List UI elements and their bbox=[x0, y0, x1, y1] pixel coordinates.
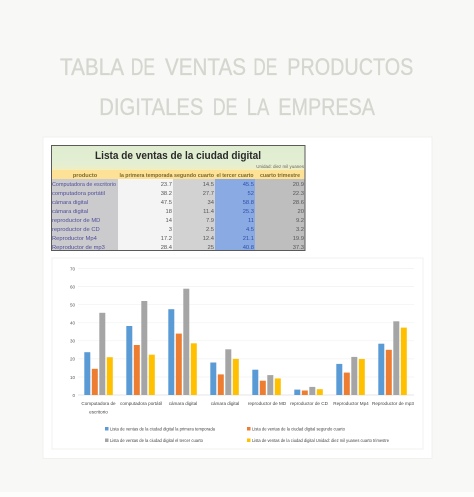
chart legend: Lista de ventas de la ciudad digital Unidad: diez mil yuanes cuarto trimestre bbox=[252, 438, 389, 443]
table header row bbox=[51, 170, 305, 179]
chart y axis labels: 20 bbox=[70, 356, 75, 362]
title bbox=[60, 54, 413, 121]
table values: 28.6 bbox=[293, 200, 304, 206]
chart category labels: Computadora de bbox=[81, 401, 116, 406]
table values: 25 bbox=[208, 245, 214, 251]
chart y axis labels: 30 bbox=[70, 338, 75, 344]
table header row: el tercer cuarto bbox=[216, 173, 254, 179]
table values: 21.1 bbox=[243, 236, 254, 242]
table values bbox=[161, 182, 304, 251]
table values: 11 bbox=[248, 218, 254, 224]
bars: cuarto trimestre bbox=[107, 328, 407, 395]
title: DE bbox=[131, 54, 155, 81]
table values: 2.5 bbox=[206, 227, 214, 233]
title: DIGITALES bbox=[99, 94, 203, 121]
table values: 11.4 bbox=[203, 209, 215, 215]
table header row: segundo cuarto bbox=[174, 173, 215, 179]
table values: 19.9 bbox=[293, 236, 304, 242]
table product names: Computadora de escritorio bbox=[52, 182, 116, 188]
chart y axis labels: 70 bbox=[70, 266, 75, 272]
chart category labels: cámara digital bbox=[211, 401, 239, 406]
table values: 4.5 bbox=[246, 227, 254, 233]
table values: 25.3 bbox=[243, 209, 254, 215]
table values: 28.4 bbox=[161, 245, 173, 251]
title: PRODUCTOS bbox=[287, 54, 413, 81]
chart y axis labels bbox=[70, 266, 75, 398]
table title band: Unidad: diez mil yuanes bbox=[256, 164, 305, 169]
table values: 37.3 bbox=[293, 245, 304, 251]
title: LA bbox=[247, 94, 269, 121]
table values: 45.5 bbox=[243, 182, 254, 188]
table product names: Reproductor Mp4 bbox=[52, 236, 98, 242]
bars: segundo cuarto bbox=[92, 334, 392, 395]
chart y axis labels: 0 bbox=[72, 393, 75, 398]
title: TABLA bbox=[60, 54, 124, 81]
table column fills bbox=[51, 179, 305, 250]
chart category labels: reproductor de MD bbox=[248, 401, 287, 406]
title: EMPRESA bbox=[278, 94, 375, 121]
table product names: cámara digital bbox=[52, 200, 88, 206]
table header row: cuarto trimestre bbox=[260, 173, 300, 179]
table product names: computadora portátil bbox=[52, 191, 105, 197]
table values: 58.8 bbox=[243, 200, 254, 206]
table values: 23.7 bbox=[161, 182, 172, 188]
bars: primera temporada bbox=[84, 309, 384, 395]
table values: 38.2 bbox=[161, 191, 172, 197]
title: DE bbox=[213, 94, 237, 121]
chart category labels: Reproductor Mp4 bbox=[333, 401, 369, 406]
table title band: Lista de ventas de la ciudad digital bbox=[95, 150, 261, 162]
table values: 20 bbox=[298, 209, 304, 215]
table values: 14.5 bbox=[203, 182, 214, 188]
chart legend: Lista de ventas de la ciudad digital la primera temporada bbox=[110, 426, 215, 432]
table values: 22.3 bbox=[293, 191, 304, 197]
table product names: reproductor de CD bbox=[52, 227, 100, 233]
chart category labels bbox=[81, 401, 414, 414]
chart category labels: computadora portátil bbox=[120, 401, 162, 406]
table values: 34 bbox=[208, 200, 215, 206]
chart legend: Lista de ventas de la ciudad digital el tercer cuarto bbox=[110, 438, 203, 443]
table header row: producto bbox=[73, 173, 98, 179]
table product names: cámara digital bbox=[52, 209, 88, 215]
table values: 3 bbox=[169, 227, 172, 233]
table values: 18 bbox=[166, 209, 172, 215]
table values: 3.2 bbox=[296, 227, 304, 233]
title: VENTAS bbox=[165, 54, 246, 81]
chart y axis labels: 50 bbox=[70, 302, 75, 308]
table values: 17.2 bbox=[161, 236, 172, 242]
panel: white card bbox=[43, 137, 432, 458]
panel: bar chart bbox=[52, 258, 423, 449]
chart legend: Lista de ventas de la ciudad digital segundo cuarto bbox=[252, 426, 345, 432]
chart y axis labels: 10 bbox=[70, 375, 75, 380]
bars: tercer cuarto bbox=[99, 289, 399, 395]
chart gridlines bbox=[78, 268, 414, 395]
chart category labels: Reproductor de mp3 bbox=[372, 401, 414, 406]
panel: sales table bbox=[51, 145, 305, 251]
table values: 52 bbox=[248, 191, 254, 197]
table values: 7.9 bbox=[206, 218, 214, 224]
table values: 40.8 bbox=[243, 245, 254, 251]
chart legend bbox=[105, 426, 389, 443]
table product names: reproductor de MD bbox=[52, 218, 100, 224]
table values: 9.2 bbox=[296, 218, 304, 224]
chart category labels: reproductor de CD bbox=[290, 401, 329, 406]
table header row: la primera temporada bbox=[120, 173, 173, 179]
table values: 12.4 bbox=[203, 236, 215, 242]
table product names: Reproductor de mp3 bbox=[52, 245, 105, 251]
table values: 47.5 bbox=[161, 200, 172, 206]
table values: 20.9 bbox=[293, 182, 304, 188]
table values: 27.7 bbox=[203, 191, 214, 197]
title: DE bbox=[253, 54, 277, 81]
table title band bbox=[51, 145, 305, 170]
chart y axis labels: 60 bbox=[70, 284, 75, 290]
table product names bbox=[52, 182, 116, 251]
table values: 14 bbox=[166, 218, 173, 224]
chart y axis labels: 40 bbox=[70, 320, 75, 326]
chart category labels: cámara digital bbox=[169, 401, 197, 406]
chart category labels: escritorio bbox=[89, 410, 108, 414]
